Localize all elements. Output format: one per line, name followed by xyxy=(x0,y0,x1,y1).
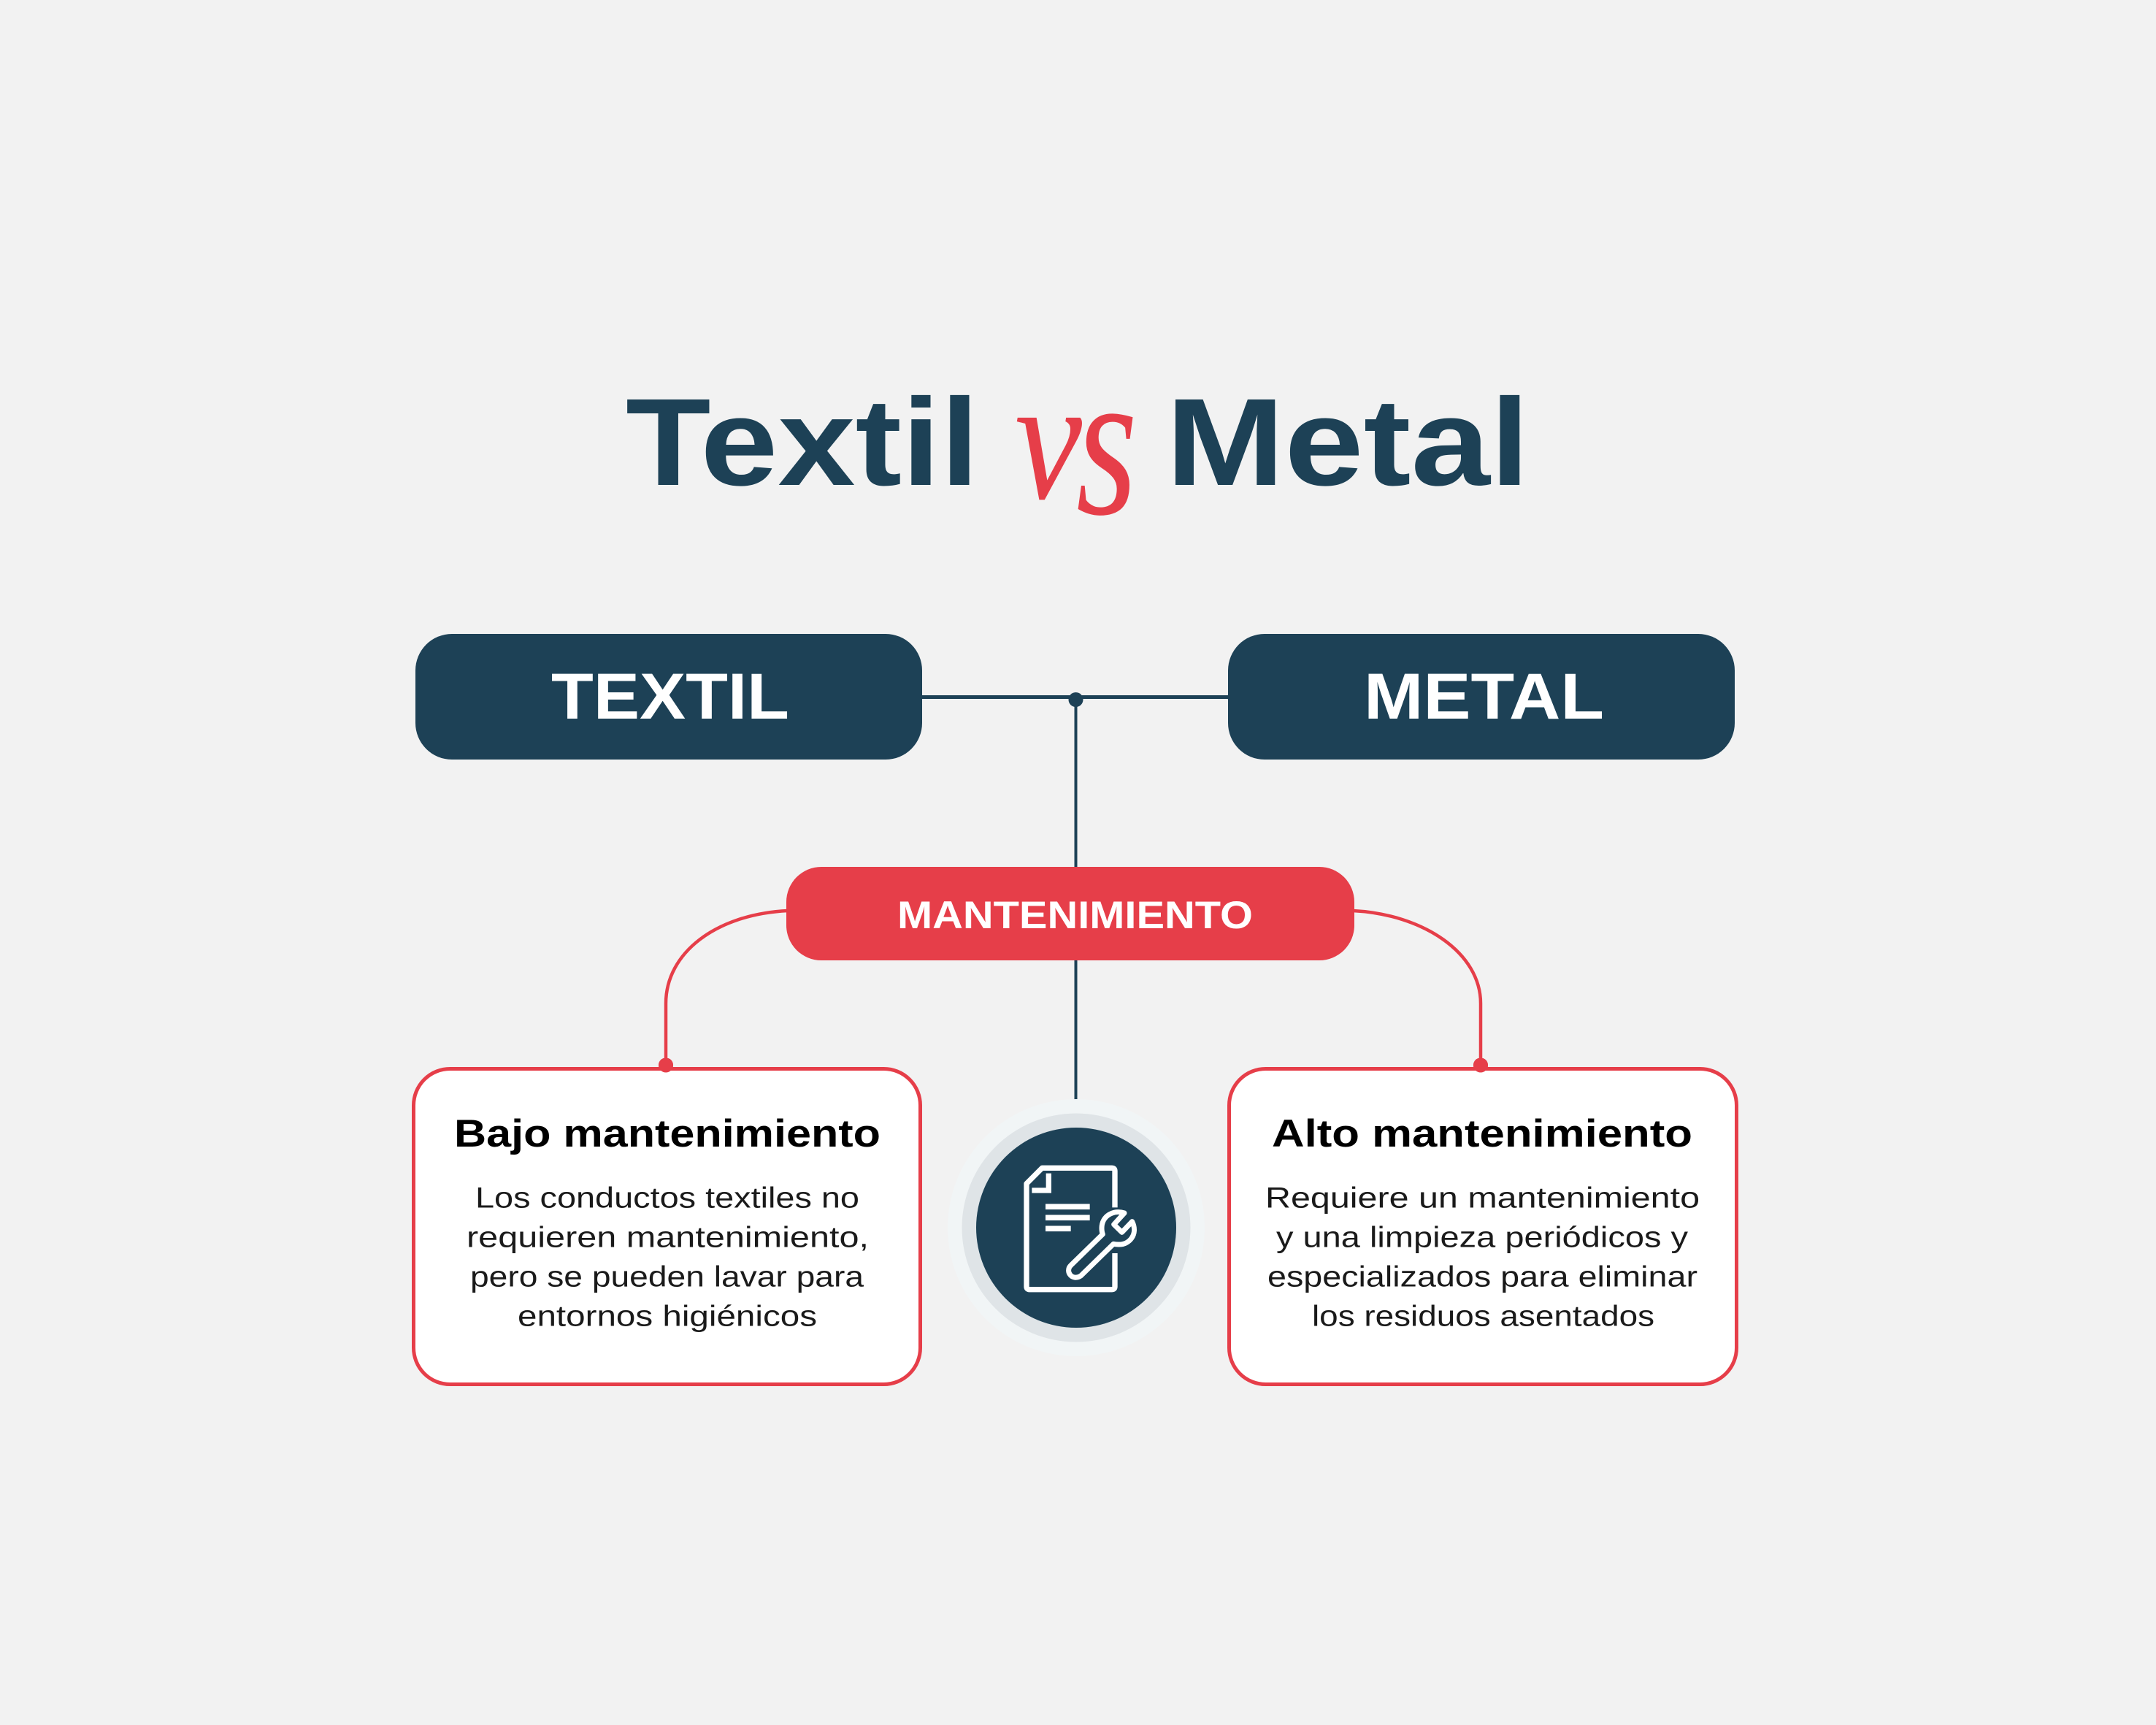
panel: alto mantenimiento xyxy=(1229,1057,1736,1385)
header: metal xyxy=(1228,634,1735,760)
text block: textile description xyxy=(467,1182,869,1332)
text block: textile description: pero se pueden lavar para xyxy=(470,1261,864,1293)
text block: textile description: requieren mantenimiento, xyxy=(467,1221,869,1253)
connector: junction dot xyxy=(1069,692,1083,707)
category pill: mantenimiento xyxy=(786,867,1354,960)
text block: metal description xyxy=(1265,1182,1700,1332)
connector: curve to left card xyxy=(659,911,788,1072)
title: Metal xyxy=(1166,373,1530,512)
panel: bajo mantenimiento xyxy=(413,1057,920,1385)
connector: curve to right card xyxy=(1353,911,1488,1072)
title: vs script word: v xyxy=(1015,342,1082,536)
title: vs script word: s xyxy=(1076,325,1138,559)
title: Textil xyxy=(626,373,979,512)
header: textil xyxy=(415,634,922,760)
heading: alto mantenimiento: Alto mantenimiento xyxy=(1272,1112,1692,1155)
connector: vertical line to mantenimiento pill xyxy=(1075,700,1078,869)
text block: textile description: entornos higiénicos xyxy=(518,1300,817,1332)
title: vs script word xyxy=(1015,325,1138,559)
header: metal: METAL xyxy=(1364,659,1604,733)
text block: textile description: Los conductos textiles no xyxy=(475,1182,859,1214)
title xyxy=(626,325,1530,559)
connector: vertical line to icon xyxy=(1075,959,1078,1100)
text block: metal description: Requiere un mantenimiento xyxy=(1265,1182,1700,1214)
heading: bajo mantenimiento: Bajo mantenimiento xyxy=(454,1112,881,1155)
text block: metal description: y una limpieza periódicos y xyxy=(1276,1221,1688,1253)
category pill: mantenimiento: MANTENIMIENTO xyxy=(897,894,1253,937)
header: textil: TEXTIL xyxy=(551,659,789,733)
text block: metal description: especializados para eliminar xyxy=(1267,1261,1697,1293)
connector: horizontal line between headers xyxy=(922,695,1228,699)
text block: metal description: los residuos asentados xyxy=(1312,1300,1654,1332)
icon: maintenance document with wrench xyxy=(948,1099,1205,1356)
